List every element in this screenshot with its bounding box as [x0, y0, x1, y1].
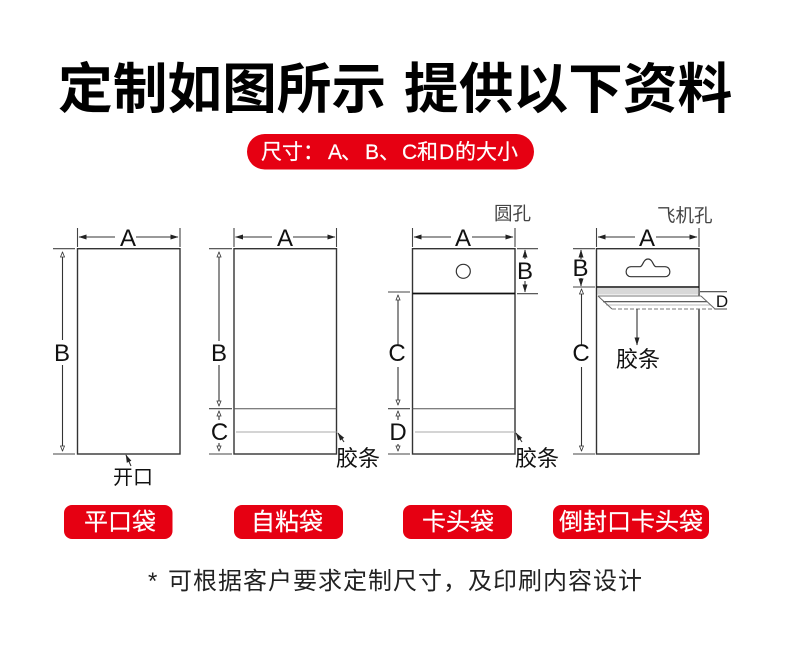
- dimension C: [388, 292, 410, 409]
- dimension B: [209, 249, 232, 409]
- panel: reverse-seal header-card bag with airplane hole: [572, 202, 728, 454]
- dimension B: B: [54, 340, 70, 367]
- adhesive label with arrow: [616, 309, 660, 374]
- bag outline: [596, 249, 699, 454]
- dimension A: [596, 225, 699, 252]
- title: 定制如图所示: [58, 45, 386, 124]
- bag outline: [234, 249, 336, 454]
- button: header-card bag: [403, 502, 512, 539]
- subtitle pill: dimensions A, B, C and D: 、: [341, 136, 362, 166]
- dimension A: A: [639, 225, 655, 252]
- button: flat-opening bag: 平口袋: [84, 502, 156, 537]
- dimension B: B: [572, 255, 589, 282]
- subtitle pill: dimensions A, B, C and D: [247, 134, 534, 170]
- dimension B: [53, 249, 75, 454]
- title: [58, 45, 732, 124]
- button: header-card bag: 卡头袋: [422, 502, 494, 537]
- dimension B: B: [517, 258, 533, 285]
- bag outline: [412, 249, 515, 454]
- opening label with arrow: 开口: [113, 461, 153, 490]
- icon: round hole: [456, 264, 470, 278]
- airplane hole label: 飞机孔: [657, 202, 713, 228]
- icon: airplane hole: [626, 259, 670, 277]
- dimension D: D: [389, 419, 407, 446]
- footnote: 可根据客户要求定制尺寸，及印刷内容设计: [168, 561, 643, 596]
- dimension C: C: [388, 340, 406, 367]
- dimension A: A: [455, 225, 471, 252]
- panel: self-adhesive bag: [209, 225, 380, 473]
- dimension C: C: [572, 340, 590, 367]
- round hole label: 圆孔: [494, 200, 531, 226]
- panel: header-card bag with round hole: [388, 200, 559, 473]
- subtitle pill: dimensions A, B, C and D: D: [439, 141, 454, 164]
- dimension B: B: [211, 340, 227, 367]
- subtitle pill: dimensions A, B, C and D: 和: [417, 136, 438, 166]
- subtitle pill: dimensions A, B, C and D: B: [365, 141, 379, 164]
- dimension A: A: [120, 225, 136, 252]
- dimension B: [572, 249, 595, 287]
- adhesive label with arrow: 胶条: [336, 441, 380, 473]
- adhesive label with arrow: 胶条: [616, 342, 660, 374]
- flap fold and adhesive strip: [234, 409, 336, 432]
- subtitle pill: dimensions A, B, C and D: 、: [379, 136, 400, 166]
- button: self-adhesive bag: [234, 502, 343, 539]
- dimension A: [234, 225, 336, 252]
- panel: flat-opening bag: [53, 225, 180, 490]
- button: flat-opening bag: [64, 502, 172, 539]
- adhesive label with arrow: 胶条: [515, 441, 559, 473]
- dimension C: C: [211, 419, 228, 446]
- subtitle pill: dimensions A, B, C and D: 尺寸：: [261, 136, 324, 166]
- bag outline: [78, 249, 180, 454]
- button: reverse-seal header-card bag: 倒封口卡头袋: [559, 502, 703, 537]
- header fold and adhesive strip: [412, 294, 515, 432]
- dimension D: D: [716, 292, 728, 311]
- dimension A: A: [277, 225, 293, 252]
- subtitle pill: dimensions A, B, C and D: 的大小: [455, 136, 518, 166]
- title: 提供以下资料: [404, 45, 732, 124]
- subtitle pill: dimensions A, B, C and D: C: [402, 141, 417, 164]
- adhesive strip detail: [596, 287, 715, 309]
- footnote: *: [148, 568, 158, 595]
- dimension B: [517, 249, 538, 294]
- dimension A: [78, 225, 180, 252]
- button: self-adhesive bag: 自粘袋: [251, 502, 323, 537]
- dimension D: [700, 292, 728, 311]
- dimension A: [412, 225, 515, 252]
- subtitle pill: dimensions A, B, C and D: A: [328, 141, 342, 164]
- dimension D: [388, 411, 410, 454]
- dimension C: [209, 411, 232, 454]
